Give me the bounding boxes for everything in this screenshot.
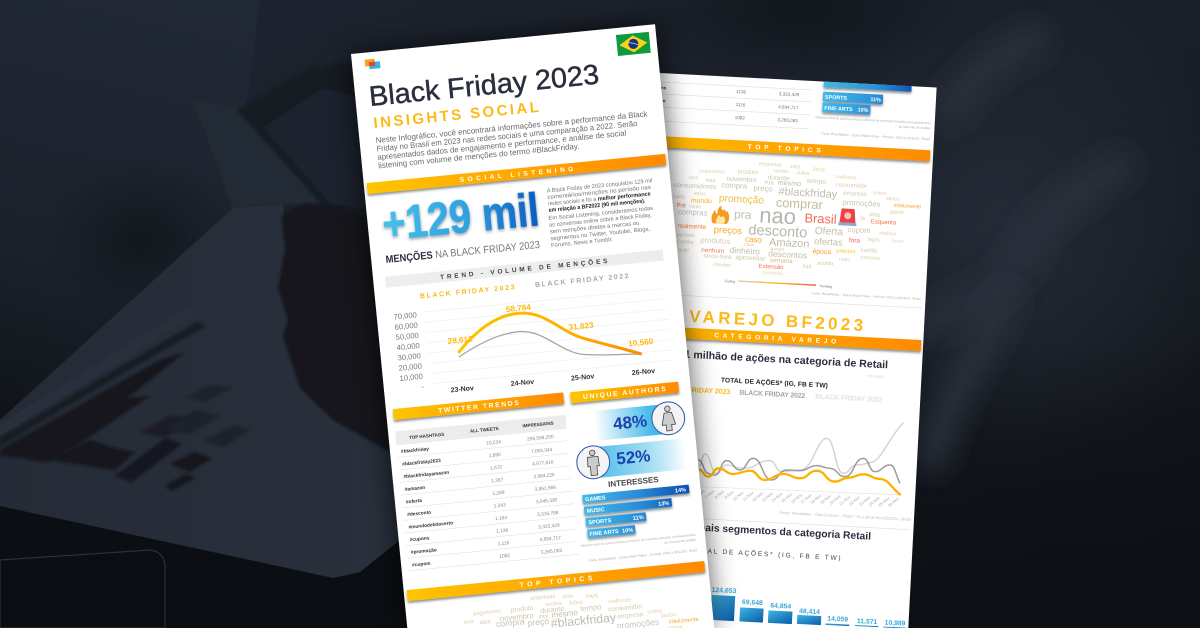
intro paragraph: apresentados dados de engajamento e performance, e análise de social bbox=[377, 129, 627, 162]
mentions caption: MENÇÕES NA BLACK FRIDAY 2023 bbox=[385, 238, 541, 266]
line chart: total shares 2023 vs 2022: 6-Nov bbox=[694, 488, 706, 499]
line chart: mentions trend: 10,000 bbox=[399, 372, 423, 383]
table: top hashtags: #oferta bbox=[406, 498, 423, 505]
table remainder: 1116 bbox=[736, 102, 746, 108]
bar chart: segments: 64,854 bbox=[770, 603, 792, 611]
stat: 48 percent women bbox=[593, 400, 686, 442]
word cloud: casa bbox=[744, 242, 755, 247]
line chart: total shares 2023 vs 2022: 18-Nov bbox=[809, 493, 822, 505]
word cloud: nenhum bbox=[701, 247, 724, 255]
table: top hashtags: #amazon bbox=[404, 485, 426, 493]
word cloud: período bbox=[677, 232, 695, 239]
chart legend: BLACK FRIDAY 2023 bbox=[661, 386, 731, 396]
table: top hashtags: #blackfridayamazon bbox=[403, 470, 450, 480]
word cloud: acesso bbox=[769, 246, 785, 252]
icon: brazil flag bbox=[616, 32, 651, 56]
word cloud: mais bbox=[839, 257, 851, 263]
word cloud bbox=[669, 157, 923, 284]
table: top hashtags: #cupom bbox=[412, 561, 431, 568]
table: top hashtags: 1,243 bbox=[494, 502, 506, 510]
word cloud: loja bbox=[803, 264, 812, 270]
word cloud: compras bbox=[678, 207, 708, 218]
heading bar: unique authors bbox=[570, 382, 679, 403]
interest bars: 13% bbox=[658, 501, 670, 508]
word cloud: Confira bbox=[677, 239, 694, 246]
line chart: mentions trend: 25-Nov bbox=[571, 373, 595, 383]
word cloud: pagamento bbox=[699, 168, 725, 176]
word cloud: data bbox=[705, 178, 716, 184]
word cloud: produto bbox=[510, 605, 534, 614]
heading bar: social listening bbox=[367, 154, 666, 194]
smartphone held in the hand bbox=[237, 60, 370, 224]
word cloud: pagamento bbox=[473, 609, 501, 617]
bar chart: segments: 48,414 bbox=[799, 608, 820, 616]
word cloud: semana bbox=[770, 257, 793, 265]
explanatory text: comentários/menções no período nas bbox=[547, 185, 651, 201]
table remainder: ons bbox=[658, 85, 667, 90]
chart legend bbox=[661, 386, 882, 404]
table remainder: 3,322,429 bbox=[779, 91, 800, 97]
table: top hashtags: 1,269 bbox=[492, 490, 505, 497]
hand silhouette bbox=[278, 204, 420, 460]
interest bars: MUSIC bbox=[587, 507, 605, 515]
word cloud: valor bbox=[693, 191, 706, 198]
heading bar: categoria varejo: CATEGORIA VAREJO bbox=[714, 332, 836, 346]
word cloud: dinheiro bbox=[729, 245, 760, 256]
word cloud: época bbox=[812, 248, 831, 256]
stat: 52 percent men: 52% bbox=[615, 446, 651, 468]
source note bbox=[814, 115, 931, 141]
line chart: mentions trend: - bbox=[421, 382, 425, 391]
word cloud: aproveitar bbox=[735, 254, 766, 263]
word cloud: ofertas bbox=[814, 235, 843, 248]
table: top hashtags bbox=[395, 415, 579, 571]
table remainder: 4,894,717 bbox=[778, 104, 799, 110]
word cloud: mundo bbox=[691, 197, 712, 205]
source note: Fonte: BrandWatch – Query Black Friday – Período: 23/11 a 26/11/23 - Brasil bbox=[821, 132, 930, 141]
interest bars: 10% bbox=[622, 528, 634, 535]
interest bars: 14% bbox=[675, 487, 686, 494]
table remainder: 3,265,083 bbox=[777, 117, 798, 123]
explanatory text: as conversas online sobre a Black Friday, bbox=[549, 213, 652, 229]
table: top hashtags: #mundodebitocerto bbox=[408, 520, 453, 531]
line chart: mentions trend: 58,784 bbox=[505, 303, 532, 314]
word cloud: PIX bbox=[539, 614, 549, 621]
word cloud: #blackfriday bbox=[778, 186, 838, 201]
title: Black Friday 2023 bbox=[368, 59, 600, 112]
line chart: total shares 2023 vs 2022: 23-Nov bbox=[858, 495, 871, 507]
interest bars remainder bbox=[822, 82, 912, 117]
document: front page of infographic bbox=[351, 24, 714, 628]
bar chart: segments bbox=[710, 587, 908, 628]
word cloud: gastar bbox=[890, 209, 905, 216]
line chart: mentions trend: 28,612 bbox=[447, 334, 473, 346]
line chart: mentions trend: 31,823 bbox=[568, 321, 594, 332]
word cloud: dias bbox=[869, 212, 880, 219]
word cloud: Oferta bbox=[814, 226, 844, 238]
phone on the desk bbox=[0, 550, 165, 628]
blurred hands on the right bbox=[925, 35, 1130, 470]
line chart: mentions trend: 30,000 bbox=[397, 351, 421, 362]
line chart: mentions trend: 10,560 bbox=[628, 337, 654, 348]
word cloud: Julius bbox=[796, 170, 810, 177]
line chart: total shares 2023 vs 2022: 25-Nov bbox=[877, 496, 890, 508]
word cloud: PIX bbox=[765, 181, 774, 187]
table: top hashtags: 3,316,788 bbox=[537, 510, 559, 518]
bar chart: segments: 124,653 bbox=[712, 587, 737, 595]
line chart: total shares 2023 vs 2022: 11-Nov bbox=[741, 490, 754, 502]
word cloud: pessoas bbox=[861, 255, 881, 262]
word cloud: Amazon bbox=[769, 236, 810, 251]
subheading: retail shares: Mais de 1 milhão de ações na categoria de Retail bbox=[643, 346, 888, 371]
chart legend: BLACK FRIDAY 2022 bbox=[535, 273, 629, 289]
word cloud: Extensão bbox=[758, 264, 784, 271]
bar chart subtitle: TOTAL DE AÇÕES* (IG, FB E TW) bbox=[690, 545, 843, 562]
word cloud: livros bbox=[891, 238, 904, 245]
heading bar: categoria varejo bbox=[606, 324, 921, 351]
word cloud: consumidor bbox=[836, 182, 867, 190]
word cloud: empresa bbox=[843, 191, 867, 198]
word cloud: PAÍS bbox=[813, 166, 826, 174]
word cloud: vendas bbox=[545, 601, 563, 608]
interest bars: SPORTS bbox=[588, 518, 612, 526]
table: top hashtags: 2,984,226 bbox=[533, 472, 555, 480]
table: top hashtags: #desconto bbox=[407, 510, 431, 518]
heading bar: social listening: SOCIAL LISTENING bbox=[460, 166, 574, 184]
subtitle: INSIGHTS SOCIAL bbox=[373, 99, 540, 132]
word cloud: mesmo bbox=[777, 178, 801, 188]
table: top hashtags: TOP HASHTAGS bbox=[409, 432, 444, 440]
word cloud: Pré bbox=[676, 203, 687, 210]
explanatory text: A Black Friday de 2023 conquistou 129 mil bbox=[547, 178, 653, 195]
line chart: total shares 2023 vs 2022: 16-Nov bbox=[790, 492, 803, 504]
stat: 52 percent men bbox=[575, 437, 687, 480]
word cloud: preciso bbox=[836, 248, 856, 256]
table: top hashtags: IMPRESSIONS bbox=[522, 421, 554, 429]
table: top hashtags: 4,577,616 bbox=[532, 459, 554, 468]
interests heading: INTERESSES bbox=[608, 475, 660, 489]
word cloud: consumidor bbox=[608, 603, 644, 614]
line chart: mentions trend bbox=[393, 286, 674, 400]
icon: woman bbox=[650, 400, 686, 436]
icon: fire bbox=[711, 205, 730, 224]
word cloud: será bbox=[689, 175, 699, 180]
stat: 48 percent women: 48% bbox=[612, 411, 648, 434]
word cloud: clientes bbox=[713, 262, 731, 269]
word cloud: sexta-feira bbox=[703, 254, 732, 261]
line chart: total shares 2023 vs 2022: 14-Nov bbox=[770, 491, 783, 503]
word cloud: preço bbox=[753, 184, 773, 194]
word cloud: dados bbox=[885, 196, 900, 203]
icon: siren bbox=[838, 208, 857, 226]
icon: man bbox=[575, 444, 611, 480]
laptop base bbox=[0, 100, 405, 578]
table: top hashtags: ALL TWEETS bbox=[470, 426, 499, 434]
interest bars remainder: 10% bbox=[857, 107, 869, 114]
line chart: total shares 2023 vs 2022 bbox=[694, 423, 903, 508]
heading: varejo bf2023: VAREJO BF2023 bbox=[689, 307, 864, 335]
source note bbox=[580, 533, 698, 563]
word cloud: compra bbox=[721, 180, 748, 191]
word cloud: tempo bbox=[807, 178, 826, 186]
heading bar: top topics: TOP TOPICS bbox=[519, 575, 593, 589]
bar chart: segments: 10,989 bbox=[884, 620, 906, 628]
section bar: trend bbox=[385, 250, 664, 288]
line chart: mentions trend: 23-Nov bbox=[450, 385, 474, 394]
word cloud: novembro bbox=[499, 611, 534, 623]
word cloud: ando bbox=[678, 247, 689, 253]
word cloud: produtos bbox=[700, 235, 731, 246]
intro paragraph: listening com volume de menções do termo #BlackFriday. bbox=[378, 142, 580, 170]
line chart: mentions trend: 50,000 bbox=[395, 331, 419, 342]
interest bars bbox=[582, 485, 693, 538]
interest bars remainder: 11% bbox=[870, 97, 881, 104]
word cloud: empresas bbox=[759, 161, 782, 169]
explanatory text: em relação a BF2022 (90 mil menções). bbox=[548, 198, 646, 214]
word cloud: produto bbox=[738, 169, 759, 176]
word cloud: melhores bbox=[608, 597, 632, 606]
word cloud: online bbox=[647, 608, 663, 616]
word cloud: conta bbox=[689, 204, 701, 209]
word cloud: descontos bbox=[768, 248, 807, 260]
table: top hashtags: 256,598,250 bbox=[527, 434, 554, 443]
word cloud: Brasil bbox=[804, 210, 837, 227]
word cloud: vendas bbox=[773, 168, 789, 174]
word cloud: fora bbox=[849, 237, 861, 245]
interest bars remainder: SPORTS bbox=[825, 95, 848, 102]
chart legend: BLACK FRIDAY 2023 bbox=[420, 284, 515, 300]
explanatory text: segmentos no Twitter, Youtube, Blogs, bbox=[550, 227, 651, 242]
table remainder bbox=[654, 82, 811, 129]
word cloud: sites bbox=[790, 164, 801, 171]
intro paragraph bbox=[375, 109, 651, 170]
date note: *23 a 26/11 bbox=[866, 374, 884, 379]
word cloud: Julius bbox=[568, 599, 583, 607]
table: top hashtags: 1,367 bbox=[491, 477, 504, 484]
word cloud: comércio bbox=[762, 270, 783, 277]
line chart: mentions trend: 40,000 bbox=[396, 341, 420, 352]
chart title: TOTAL DE AÇÕES* (IG, FB E TW) bbox=[721, 375, 828, 390]
word cloud: durante bbox=[540, 605, 565, 615]
word cloud: acordo bbox=[817, 260, 833, 267]
table: top hashtags: 1,572 bbox=[490, 465, 503, 472]
table: top hashtags: #cupons bbox=[409, 535, 430, 543]
line chart: mentions trend: 70,000 bbox=[393, 310, 417, 322]
table remainder: 1082 bbox=[735, 115, 745, 121]
table: top hashtags: #promoção bbox=[411, 547, 437, 556]
source note: ao intervalo de análise bbox=[664, 538, 696, 545]
line chart: mentions trend: 24-Nov bbox=[510, 379, 535, 388]
table remainder: oção bbox=[655, 98, 666, 103]
word cloud: novembro bbox=[726, 176, 757, 184]
word cloud: nao bbox=[759, 202, 797, 229]
explanatory text: redes sociais e foi a melhor performance bbox=[548, 191, 651, 207]
word cloud: será bbox=[463, 619, 474, 626]
table remainder: 1136 bbox=[736, 89, 747, 95]
word cloud: melhor bbox=[879, 231, 897, 238]
line chart: total shares 2023 vs 2022: 17-Nov bbox=[800, 493, 813, 505]
source note: Fonte: Shareablee – Data Explorer – Retail – 01 a 26 de Nov/23/22/21 - Brasil bbox=[780, 511, 911, 522]
word cloud: preços bbox=[714, 224, 743, 236]
heading bar: unique authors: UNIQUE AUTHORS bbox=[583, 386, 667, 401]
line chart: total shares 2023 vs 2022: 15-Nov bbox=[780, 492, 793, 504]
line chart: total shares 2023 vs 2022: 8-Nov bbox=[714, 489, 725, 500]
explanatory text bbox=[546, 178, 658, 249]
word cloud: cartão bbox=[860, 248, 878, 255]
chart legend: BLACK FRIDAY 2022 bbox=[815, 394, 882, 404]
source note: ao intervalo de análise bbox=[899, 125, 931, 130]
table: top hashtags: 7,004,344 bbox=[531, 447, 553, 455]
heading bar: top topics bbox=[407, 561, 705, 601]
shadow of front page bbox=[351, 24, 712, 628]
word cloud: empresa bbox=[617, 611, 644, 621]
source note: *Número total de autores únicos comunica às mesmas menções correspondentes bbox=[815, 115, 931, 125]
bar chart: segments: 14,059 bbox=[827, 616, 848, 624]
table: top hashtags: 3,861,966 bbox=[534, 485, 557, 493]
word cloud: online bbox=[873, 190, 887, 197]
subheading: segments: Principais segmentos da categoria Retail bbox=[670, 521, 871, 543]
table: top hashtags: 3,265,083 bbox=[541, 548, 563, 556]
word cloud: lojas bbox=[867, 237, 880, 244]
word cloud: sites bbox=[562, 593, 574, 600]
table: top hashtags: 4,894,717 bbox=[539, 535, 562, 543]
word cloud: cado bbox=[673, 194, 686, 201]
word cloud: consumidores bbox=[674, 182, 717, 191]
word cloud: realmente bbox=[678, 223, 707, 231]
word cloud: PAÍS bbox=[586, 592, 599, 601]
word cloud: empresas bbox=[530, 594, 556, 602]
word cloud: promoções bbox=[842, 198, 881, 209]
word cloud: dados bbox=[660, 612, 676, 619]
word cloud: preço bbox=[527, 616, 550, 628]
trend legend bbox=[725, 279, 833, 289]
word cloud bbox=[462, 580, 700, 628]
trend legend: Fading bbox=[725, 279, 735, 284]
line chart: total shares 2023 vs 2022: 22-Nov bbox=[848, 495, 861, 507]
interest bars: GAMES bbox=[585, 495, 606, 503]
word cloud: durante bbox=[768, 174, 790, 182]
table: top hashtags: 3,322,429 bbox=[538, 523, 560, 531]
table: top hashtags: 1,184 bbox=[495, 515, 508, 522]
word cloud: melhores bbox=[835, 174, 857, 181]
interest bars: FINE ARTS bbox=[589, 529, 619, 538]
line chart: total shares 2023 vs 2022: 9-Nov bbox=[723, 489, 735, 500]
word cloud: infelizmente bbox=[893, 203, 921, 210]
table: top hashtags: 1,136 bbox=[496, 528, 509, 535]
word cloud: mesmo bbox=[551, 608, 579, 620]
line chart: mentions trend: 60,000 bbox=[394, 321, 418, 332]
explanatory text: Forums, News e Tumblr. bbox=[551, 237, 614, 249]
big number: +129 mil bbox=[380, 183, 541, 250]
line chart: total shares 2023 vs 2022: 19-Nov bbox=[819, 493, 832, 505]
logo bbox=[365, 58, 381, 70]
word cloud: comprar bbox=[776, 195, 824, 212]
interest bars remainder: FINE ARTS bbox=[824, 106, 853, 113]
word cloud: tempo bbox=[580, 602, 602, 613]
heading bar: top topics bbox=[616, 134, 930, 161]
heading bar: top topics: TOP TOPICS bbox=[748, 144, 821, 155]
table: top hashtags: #blackfriday bbox=[401, 446, 430, 455]
word cloud: infelizmente bbox=[669, 617, 699, 626]
section bar: trend: TREND - VOLUME DE MENÇÕES bbox=[440, 256, 608, 281]
heading bar: twitter trends: TWITTER TRENDS bbox=[438, 400, 520, 415]
explanatory text: sem menções diretas a marcas ou bbox=[550, 221, 640, 235]
bar chart: segments: 69,648 bbox=[742, 599, 763, 607]
line chart: total shares 2023 vs 2022: 12-Nov bbox=[751, 491, 764, 503]
intro paragraph: Friday no Brasil em 2023 nas redes sociais e uma comparação a 2022. Serão bbox=[376, 119, 638, 153]
line chart: total shares 2023 vs 2022: 13-Nov bbox=[761, 491, 774, 503]
chart legend: BLACK FRIDAY 2022 bbox=[739, 390, 806, 400]
word cloud: tá bbox=[860, 216, 866, 222]
bar chart: segments: 11,571 bbox=[857, 618, 878, 626]
line chart: total shares 2023 vs 2022: 21-Nov bbox=[838, 494, 851, 506]
line chart: total shares 2023 vs 2022: 26-Nov bbox=[887, 496, 900, 508]
table: top hashtags: 3,945,330 bbox=[536, 497, 558, 505]
word cloud: caso bbox=[745, 235, 763, 245]
interest bars: 11% bbox=[633, 515, 644, 522]
line chart: mentions trend: 20,000 bbox=[398, 362, 422, 373]
word cloud: pra bbox=[734, 207, 752, 222]
word cloud: cupom bbox=[847, 225, 871, 235]
line chart: total shares 2023 vs 2022: 7-Nov bbox=[704, 489, 715, 499]
table: top hashtags: 1082 bbox=[499, 553, 511, 560]
line chart: mentions trend: 26-Nov bbox=[632, 368, 656, 377]
source note: Fonte: BrandWatch – Query Black Friday – Período: 23/11 a 26/11/23 - Brasil bbox=[589, 548, 698, 563]
table: top hashtags: 10,234 bbox=[486, 439, 502, 447]
explanatory text: Em Social Listening, consideramos todas bbox=[548, 206, 653, 222]
chart legend bbox=[420, 273, 629, 300]
trend legend: Trending bbox=[819, 284, 833, 289]
word cloud: data bbox=[479, 619, 492, 626]
line chart: total shares 2023 vs 2022: 20-Nov bbox=[829, 494, 842, 506]
source note: Fonte: BrandWatch – Query Black Friday – Período: 23/11 a 26/11/23 - Brasil bbox=[812, 291, 921, 301]
document: back page of infographic bbox=[591, 71, 937, 628]
heading bar: twitter trends bbox=[393, 392, 564, 420]
table: top hashtags: 1,116 bbox=[497, 540, 510, 547]
word cloud: desconto bbox=[748, 222, 808, 241]
table: top hashtags: #blackfriday2023 bbox=[402, 458, 441, 468]
word cloud: promoção bbox=[719, 193, 765, 207]
intro paragraph: Neste Infográfico, você encontrará informações sobre a performance da Black bbox=[375, 109, 649, 145]
line chart: total shares 2023 vs 2022: 10-Nov bbox=[732, 490, 745, 502]
source note: *Número total de autores únicos comunica às mesmas menções correspondentes bbox=[580, 533, 696, 548]
table: top hashtags: 1,890 bbox=[489, 452, 501, 459]
line chart: total shares 2023 vs 2022: 24-Nov bbox=[868, 495, 881, 507]
word cloud: Esquenta bbox=[871, 219, 897, 227]
